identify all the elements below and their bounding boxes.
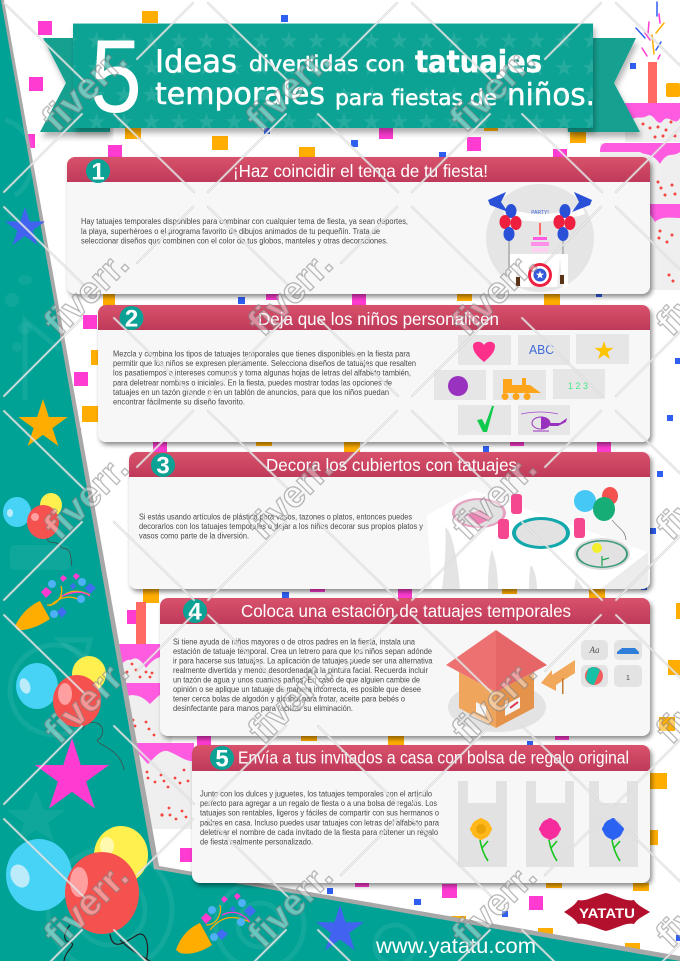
watermark overlay: fiverr. (36, 447, 136, 547)
card 4 body text: estación de tatuaje temporal. Crea un letrero para que los niños sepan adónde (173, 647, 433, 656)
card 3 heading: Decora los cubiertos con tatuajes (266, 455, 517, 475)
card 5 body text: deletrear el nombre de cada invitado de la fiesta para obtener un regalo (200, 828, 439, 837)
card 1 body text: Hay tatuajes temporales disponibles para combinar con cualquier tema de fiesta, ya sean deportes, (81, 217, 408, 226)
icon: blue star bottom (316, 905, 364, 950)
icon: magenta star (35, 738, 109, 809)
watermark overlay: fiverr. (444, 243, 544, 343)
panel: card 2 (98, 305, 650, 442)
pink cups (498, 494, 585, 539)
right birthday cake (600, 62, 680, 290)
card 2 body text: permitir que los niños se expresen plenamente. Selecciona diseños de tatuajes que resalten (113, 359, 416, 368)
title text: Ideas (155, 44, 237, 80)
logo: Yatatu (564, 893, 650, 931)
card 1 body text (81, 217, 408, 246)
card 2 tattoo tiles (434, 334, 629, 435)
watermark overlay: fiverr. (444, 855, 544, 955)
card 3 body text (139, 512, 423, 540)
card 2 number badge: 2 (125, 306, 138, 332)
watermark overlay: fiverr. (240, 855, 340, 955)
icon: ABC letters: ABC (529, 342, 554, 357)
card 5 heading: Envía a tus invitados a casa con bolsa de regalo original (238, 748, 629, 768)
icon: big balloons (6, 826, 150, 961)
watermark overlay: fiverr. (444, 447, 544, 547)
big number five: 5 (90, 19, 142, 135)
card 3 body text: vasos como parte de la diversión. (139, 532, 249, 540)
watermark overlay: fiverr. (34, 39, 134, 139)
card 4 body text: ir para hacerse sus tatuajes. La aplicación de tatuajes puede ser una alternativa (173, 656, 433, 666)
card 5 body text (200, 790, 440, 846)
card 5 number badge (210, 746, 234, 772)
title banner (40, 19, 640, 135)
icon: purple helicopter (521, 412, 567, 431)
card 5 number badge: 5 (215, 746, 229, 772)
gift bag with pink flower (526, 781, 574, 867)
watermark overlay: fiverr. (240, 243, 340, 343)
title text: tatuajes (415, 45, 542, 80)
icon: purple ball (448, 376, 468, 396)
watermark overlay: fiverr. (36, 243, 136, 343)
card 4 number badge (183, 598, 207, 626)
card 3 header (129, 452, 650, 477)
card 4 tattoo tiles (581, 640, 642, 687)
card 5 body text: tatuajes son rentables, ligeros y fáciles de compartir con sus hermanos o (200, 808, 440, 818)
watermark overlay: fiverr. (238, 39, 338, 139)
icon: medium balloons (16, 656, 124, 770)
card 2 header (98, 305, 650, 330)
title text (155, 44, 595, 113)
panel: card 3 (129, 452, 650, 589)
card 4 tattoo tiles: 1 (626, 675, 630, 682)
card 5 body text: Junto con los dulces y juguetes, los tatuajes temporales son el artículo (200, 790, 433, 798)
title text: niños. (507, 78, 595, 113)
card 4 body text: un tazón de agua y unos cuantos paños. En caso de que alguien cambie de (173, 676, 420, 684)
card 4 body text: desinfectante para manos para facilitar su eliminación. (173, 704, 353, 713)
card 2 body text: tatuajes en un tazón grande o en un tablón de anuncios, para que los niños puedan (113, 388, 389, 397)
card 3 body text: decorarlos con los tatuajes temporales o dejar a los niños decorar sus propios platos y (139, 522, 423, 531)
gift bag with yellow flower (458, 781, 507, 867)
card 2 body text: los pasatiempos e intereses comunes y toma algunas hojas de letras del alfabeto también, (113, 368, 411, 378)
icon: party popper (15, 573, 96, 630)
website url: www.yatatu.com (375, 935, 536, 958)
panel: card 4 (160, 598, 650, 736)
watermark overlay: fiverr. (240, 651, 340, 751)
watermark overlay: fiverr. (444, 651, 544, 751)
card 4 house illustration (446, 630, 575, 732)
card 4 heading: Coloca una estación de tatuajes temporales (241, 601, 571, 621)
card 4 header (160, 598, 650, 624)
icon: green numbers: 123 (568, 381, 588, 391)
card 1 number badge (86, 158, 110, 186)
card 4 body text: realmente divertida y menos desordenada a la pintura facial. Recuerda incluir (173, 666, 428, 675)
icon: green check (477, 406, 494, 432)
watermark overlay: fiverr. (442, 39, 542, 139)
watermark overlay: fiverr. (36, 855, 136, 955)
card 4 tattoo tiles: Aa (588, 645, 600, 655)
icon: orange train (502, 378, 541, 400)
card 1 body text: la playa, superhéroes o el programa favorito de dibujos animados de tu pequeñín. Trata de (81, 227, 381, 236)
card 1 number badge: 1 (91, 158, 105, 186)
icon: blue star (5, 207, 45, 245)
card 2 body text (113, 350, 416, 406)
table balloons (574, 487, 626, 540)
card 1 party illustration (486, 184, 594, 292)
card 5 body text: de fiesta realmente personalizado. (200, 838, 313, 846)
card 2 number badge (120, 306, 144, 332)
candle sparks (636, 2, 664, 59)
card 2 body text: Mezcla y combina los tipos de tatuajes temporales que tienes disponibles en la fiesta para (113, 350, 411, 358)
card 5 body text: padres en casa. Incluso puedes usar tatuajes con letras del alfabeto para (200, 818, 439, 828)
icon: heart (473, 342, 495, 362)
card 1 body text: seleccionar diseños que combinen con el color de tus globos, manteles y otras decoraciones. (81, 237, 388, 246)
watermark overlay: fiverr. (36, 651, 136, 751)
card 4 number badge: 4 (188, 598, 202, 626)
card 3 number badge: 3 (156, 452, 170, 480)
panel: card 5 (192, 745, 650, 883)
icon: small balloons (3, 493, 72, 566)
watermark overlay: fiverr. (240, 447, 340, 547)
plate 2 (512, 517, 570, 549)
gift bag with blue flower (589, 781, 638, 867)
card 5 header (192, 745, 650, 771)
card 2 body text: encontrar fácilmente su diseño favorito. (113, 398, 245, 406)
title text: temporales (155, 77, 325, 112)
icon: bottom party popper (176, 893, 256, 954)
card 1 header (67, 157, 650, 182)
card 5 body text: perfecto para agregar a un regalo de fiesta o a una bolsa de regalos. Los (200, 799, 437, 808)
sign arrow (541, 660, 575, 694)
title text: para fiestas de (335, 86, 497, 110)
card 3 body text: Si estás usando artículos de plástico para vasos, tazones o platos, entonces puedes (139, 512, 412, 522)
plate 1 (452, 498, 506, 528)
icon: orange star (18, 399, 68, 446)
card 2 body text: para deletrear nombres o iniciales. En la fiesta, puedes mostrar todas las opciones de (113, 378, 393, 388)
card 2 heading: Deja que los niños personalicen (258, 309, 499, 329)
card 4 body text: tener cerca bolas de algodón y alcohol para frotar, aceite para bebés o (173, 694, 406, 704)
left birthday cake (113, 602, 194, 829)
card 3 table illustration (427, 487, 648, 589)
icon: gold star (594, 341, 614, 359)
card 1 heading: ¡Haz coincidir el tema de tu fiesta! (233, 161, 488, 181)
plate 3 (574, 538, 630, 570)
title text: divertidas con (249, 52, 405, 76)
card 3 number badge (151, 452, 175, 480)
panel: card 1 (67, 157, 650, 294)
logo: Yatatu: YATATU (579, 905, 635, 921)
card 4 body text (173, 638, 433, 713)
card 1 party illustration: PARTY! (531, 210, 549, 216)
card 4 body text: opinión o se aplique un tatuaje de manera incorrecta, es posible que desee (173, 685, 422, 694)
card 4 body text: Si tiene ayuda de niños mayores o de otros padres en la fiesta, instala una (173, 638, 416, 646)
